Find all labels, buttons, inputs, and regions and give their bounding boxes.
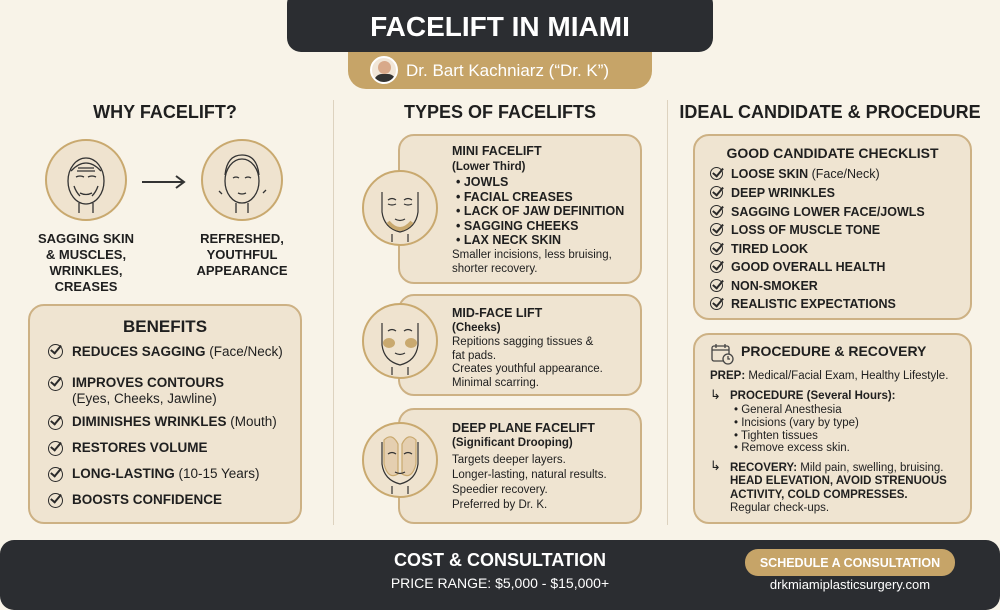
panel: benefits: RESTORES VOLUME — [72, 440, 208, 455]
label: after: REFRESHED, — [200, 231, 284, 246]
panel: mid-face lift: Creates youthful appearance. — [452, 363, 603, 375]
heading: types: TYPES OF FACELIFTS — [404, 102, 596, 122]
panel: deep plane — [398, 408, 642, 524]
panel: benefits: BOOSTS CONFIDENCE — [72, 492, 222, 507]
icon: deep plane face — [362, 422, 438, 498]
panel: candidate checklist: SAGGING LOWER FACE/JOWLS — [731, 205, 925, 219]
icon: doctor avatar — [370, 56, 398, 84]
doctor pill — [348, 52, 652, 89]
panel: benefits — [28, 304, 302, 524]
panel: procedure & recovery: HEAD ELEVATION, AVOID STRENUOUS — [730, 475, 947, 487]
panel: mini facelift: • SAGGING CHEEKS — [456, 218, 578, 232]
benefits heading: BENEFITS — [123, 317, 207, 336]
arrow — [142, 175, 186, 189]
panel: candidate checklist: LOSS OF MUSCLE TONE — [731, 223, 880, 237]
panel: procedure & recovery — [693, 333, 972, 524]
panel: mini facelift: MINI FACELIFT — [452, 144, 542, 158]
checklist heading: GOOD CANDIDATE CHECKLIST — [726, 145, 939, 161]
panel: candidate checklist: TIRED LOOK — [731, 242, 808, 256]
label: before: & MUSCLES, — [46, 247, 126, 262]
panel: mid-face lift — [398, 294, 642, 396]
label: after: APPEARANCE — [196, 263, 288, 278]
panel: procedure & recovery: PROCEDURE (Several Hours): — [730, 390, 896, 402]
panel: deep plane: Preferred by Dr. K. — [452, 499, 547, 511]
icon: calendar — [711, 344, 734, 365]
footer heading: COST & CONSULTATION — [394, 550, 606, 570]
label: before — [38, 231, 134, 294]
panel: mid-face lift: fat pads. — [452, 350, 496, 362]
footer bar — [0, 540, 1000, 610]
label: before: SAGGING SKIN — [38, 231, 134, 246]
panel: candidate checklist: REALISTIC EXPECTATIONS — [731, 297, 896, 311]
panel: mini facelift: • JOWLS — [456, 175, 508, 189]
panel: candidate checklist — [693, 134, 972, 320]
panel: candidate checklist: LOOSE SKIN (Face/Neck) — [731, 167, 880, 181]
label: before: CREASES — [55, 279, 117, 294]
url: drkmiamiplasticsurgery.com — [770, 577, 930, 592]
panel: deep plane: Speedier recovery. — [452, 484, 548, 496]
price range: PRICE RANGE: $5,000 - $15,000+ — [391, 575, 609, 591]
panel: procedure & recovery: RECOVERY: Mild pain, swelling, bruising. — [730, 462, 943, 474]
panel: candidate checklist: GOOD OVERALL HEALTH — [731, 260, 885, 274]
panel: procedure & recovery: • Incisions (vary by type) — [734, 417, 859, 429]
panel: benefits: IMPROVES CONTOURS — [72, 375, 224, 390]
panel: mid-face lift: (Cheeks) — [452, 322, 501, 334]
button: schedule: SCHEDULE A CONSULTATION — [760, 556, 940, 570]
panel: candidate checklist: DEEP WRINKLES — [731, 186, 835, 200]
title banner: FACELIFT IN MIAMI — [370, 11, 630, 42]
panel: procedure & recovery: ACTIVITY, COLD COMPRESSES. — [730, 489, 908, 501]
label: after: YOUTHFUL — [207, 247, 277, 262]
panel: deep plane: Longer-lasting, natural results. — [452, 469, 607, 481]
panel: benefits: DIMINISHES WRINKLES (Mouth) — [72, 414, 277, 429]
panel: mini facelift: • LAX NECK SKIN — [456, 233, 561, 247]
panel: benefits: (Eyes, Cheeks, Jawline) — [72, 391, 217, 406]
panel: candidate checklist: NON-SMOKER — [731, 279, 818, 293]
panel: mini facelift: (Lower Third) — [452, 160, 525, 172]
panel: mini facelift: Smaller incisions, less bruising, — [452, 249, 612, 261]
icon: mid face — [362, 303, 438, 379]
panel: procedure & recovery: Regular check-ups. — [730, 502, 829, 514]
panel: mini facelift — [398, 134, 642, 284]
icon: mini face — [362, 170, 438, 246]
panel: benefits: LONG-LASTING (10-15 Years) — [72, 466, 260, 481]
panel: mini facelift: shorter recovery. — [452, 262, 537, 274]
heading: why facelift: WHY FACELIFT? — [93, 102, 237, 122]
panel: mid-face lift: Repitions sagging tissues & — [452, 336, 593, 348]
heading: ideal candidate: IDEAL CANDIDATE & PROCEDURE — [679, 102, 981, 122]
label: before: WRINKLES, — [50, 263, 122, 278]
panel: procedure & recovery: ↳ — [710, 387, 721, 402]
icon: youthful face — [201, 139, 283, 221]
panel: deep plane: Targets deeper layers. — [452, 454, 566, 466]
panel: mid-face lift: MID-FACE LIFT — [452, 306, 542, 320]
panel: procedure & recovery: PREP: Medical/Facial Exam, Healthy Lifestyle. — [710, 370, 948, 382]
panel: deep plane: DEEP PLANE FACELIFT — [452, 421, 595, 435]
doctor pill: Dr. Bart Kachniarz (“Dr. K”) — [406, 61, 609, 80]
panel: procedure & recovery: ↳ — [710, 458, 721, 473]
panel: mini facelift: • LACK OF JAW DEFINITION — [456, 204, 624, 218]
panel: mini facelift: • FACIAL CREASES — [456, 190, 573, 204]
panel: procedure & recovery: PROCEDURE & RECOVERY — [741, 343, 926, 359]
panel: procedure & recovery: • Remove excess skin. — [734, 442, 850, 454]
button: schedule — [745, 549, 955, 576]
panel: mid-face lift: Minimal scarring. — [452, 376, 539, 388]
panel: procedure & recovery: • General Anesthesia — [734, 404, 842, 416]
panel: procedure & recovery: • Tighten tissues — [734, 430, 818, 442]
label: after — [196, 231, 288, 278]
icon: aged face — [45, 139, 127, 221]
panel: benefits: REDUCES SAGGING (Face/Neck) — [72, 344, 283, 359]
title banner — [287, 0, 713, 52]
panel: deep plane: (Significant Drooping) — [452, 437, 573, 449]
